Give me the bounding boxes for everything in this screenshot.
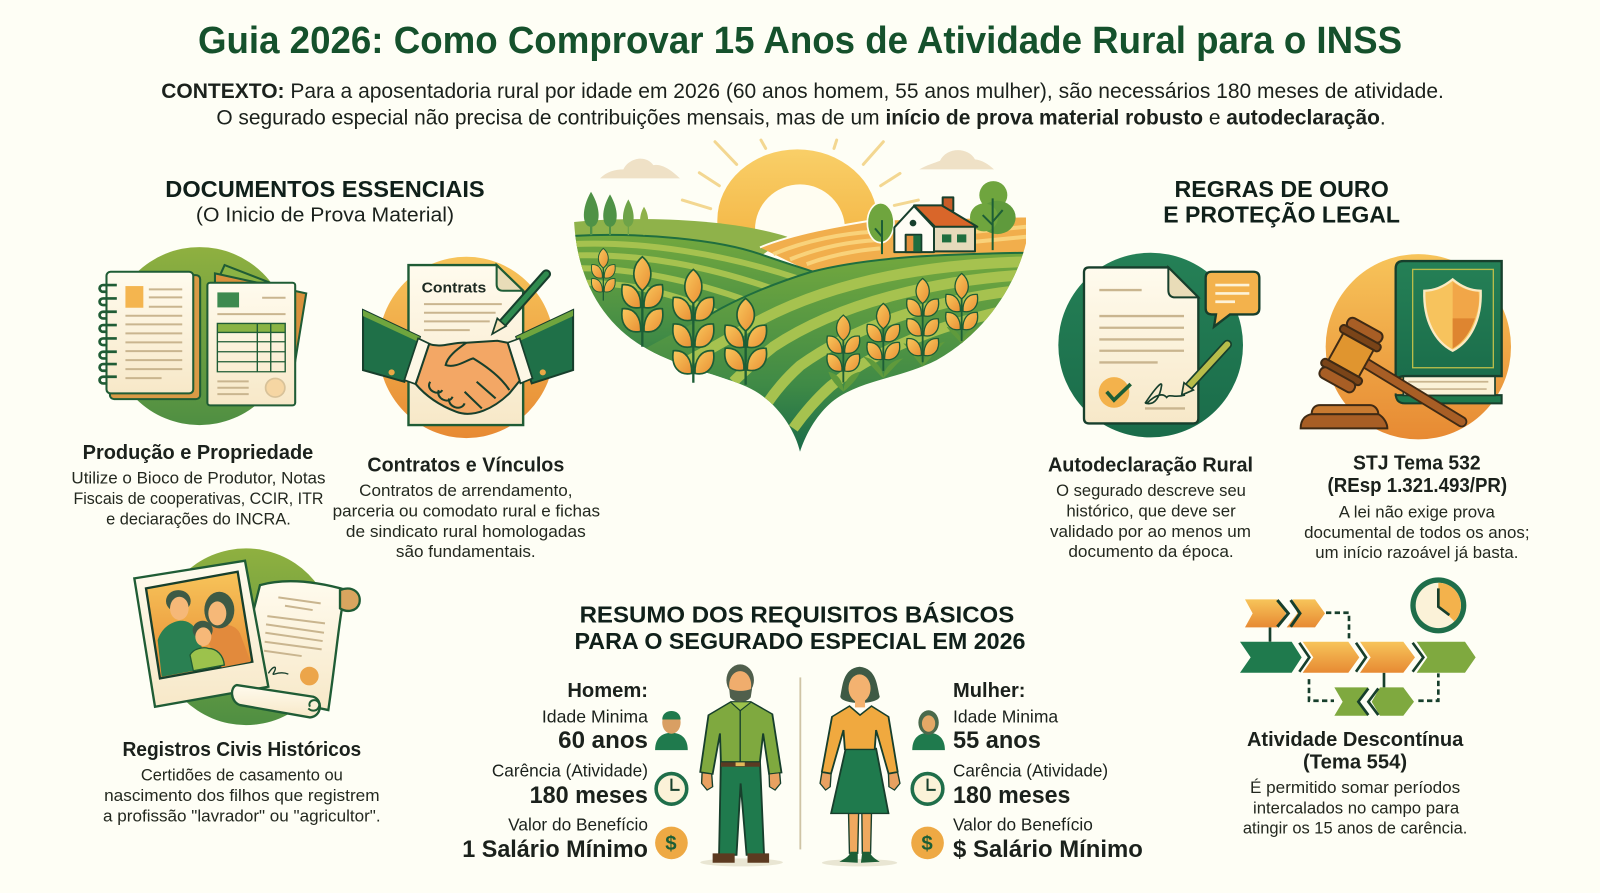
heading: regras de ouro: REGRAS DE OURO	[1174, 176, 1389, 202]
context text	[161, 79, 1444, 130]
icon: coin, man	[655, 827, 688, 859]
caption: registros civis historicos	[103, 739, 381, 826]
icon: coin, man: $	[665, 833, 677, 855]
caption: autodeclaracao rural: Autodeclaração Rural	[1048, 454, 1253, 476]
caption: contratos e vinculos	[333, 454, 600, 561]
caption: atividade descontinua: É permitido somar períodos	[1250, 778, 1460, 797]
icon: trees by the house	[867, 181, 1016, 254]
panel: atividade descontinua	[1240, 577, 1476, 838]
divider	[799, 677, 801, 849]
caption: atividade descontinua: Atividade Descontínua	[1247, 729, 1464, 751]
icon: gavel and law book	[1301, 254, 1511, 439]
column: mulher stats: Carência (Atividade)	[953, 761, 1108, 781]
column: mulher stats: 180 meses	[953, 782, 1070, 809]
icon: self-declaration document	[1058, 253, 1259, 437]
icon: handshake and contract: Contrats	[422, 281, 486, 296]
figures: man and woman	[700, 664, 900, 866]
icon: farmhouse	[894, 197, 977, 252]
icon: notebook and table	[100, 247, 306, 425]
column: mulher stats: Idade Minima	[953, 707, 1059, 727]
caption: autodeclaracao rural: documento da época.	[1068, 542, 1234, 561]
icon: clock, man	[656, 774, 687, 804]
icon: handshake and contract	[363, 257, 573, 438]
caption: registros civis historicos: Registros Civis Históricos	[122, 739, 361, 761]
icon: wheat plants	[591, 248, 979, 392]
column: mulher stats: Valor do Benefício	[953, 815, 1093, 835]
column: mulher stats: 55 anos	[953, 727, 1041, 754]
caption: contratos e vinculos: Contratos e Vínculos	[367, 454, 564, 476]
column: mulher stats: Mulher:	[953, 680, 1026, 702]
caption: autodeclaracao rural	[1048, 454, 1253, 561]
caption: atividade descontinua: (Tema 554)	[1303, 751, 1407, 773]
panel: regras de ouro	[1048, 253, 1530, 562]
caption: stj tema 532: A lei não exige prova	[1339, 502, 1496, 521]
caption: producao e propriedade: Utilize o Bioco de Produtor, Notas	[71, 469, 326, 488]
caption: atividade descontinua: intercalados no campo para	[1253, 798, 1460, 817]
heading: resumo	[574, 601, 1026, 654]
icon: woman avatar	[912, 710, 945, 750]
icon: coin, woman	[911, 827, 944, 859]
caption: autodeclaracao rural: O segurado descreve seu	[1056, 481, 1246, 500]
figure: woman	[820, 667, 900, 866]
column: homem stats	[462, 680, 648, 863]
farm fields	[570, 217, 1027, 457]
figure: man	[700, 664, 783, 866]
caption: registros civis historicos: nascimento dos filhos que registrem	[104, 786, 380, 805]
icon: sun with rays	[682, 140, 918, 274]
heading: regras de ouro: E PROTEÇÃO LEGAL	[1163, 201, 1400, 228]
caption: contratos e vinculos: Contratos de arrendamento,	[359, 481, 572, 500]
panel: resumo dos requisitos	[462, 601, 1143, 866]
column: homem stats: 180 meses	[530, 782, 648, 809]
heading: documentos essenciais: DOCUMENTOS ESSENCIAIS	[165, 176, 485, 202]
icon: cypress trees	[584, 192, 648, 235]
caption: atividade descontinua: atingir os 15 anos de carência.	[1243, 819, 1467, 838]
heading: documentos essenciais	[165, 176, 485, 227]
caption: registros civis historicos: Certidões de casamento ou	[141, 766, 343, 785]
column: homem stats: Idade Minima	[542, 707, 648, 727]
icon: clock, woman	[912, 774, 943, 804]
column: mulher stats: $ Salário Mínimo	[953, 836, 1143, 863]
caption: stj tema 532	[1304, 452, 1530, 562]
caption: autodeclaracao rural: histórico, que deve ser	[1066, 501, 1236, 520]
caption: contratos e vinculos: são fundamentais.	[396, 542, 536, 561]
caption: registros civis historicos: a profissão "lavrador" ou "agricultor".	[103, 807, 381, 826]
icon: clouds	[600, 150, 994, 178]
icon: timeline of chevrons with clock	[1240, 577, 1476, 716]
context text: O segurado especial não precisa de contribuições mensais, mas de um início de prova material robusto e autodeclaração.	[216, 106, 1386, 130]
title: Guia 2026: Como Comprovar 15 Anos de Atividade Rural para o INSS	[198, 19, 1402, 61]
caption: producao e propriedade	[71, 442, 326, 529]
caption: producao e propriedade: Fiscais de cooperativas, CCIR, ITR	[73, 489, 323, 508]
column: homem stats: 1 Salário Mínimo	[462, 836, 648, 863]
icon: family photo and certificate	[134, 548, 360, 725]
context text: CONTEXTO: Para a aposentadoria rural por idade em 2026 (60 anos homem, 55 anos mulher), são necessários 180 meses de atividade.	[161, 79, 1444, 103]
heading: resumo: PARA O SEGURADO ESPECIAL EM 2026	[574, 628, 1026, 654]
caption: contratos e vinculos: parceria ou comodato rural e fichas	[333, 501, 600, 520]
caption: stj tema 532: um início razoável já basta.	[1315, 543, 1518, 562]
caption: producao e propriedade: e deciarações do INCRA.	[106, 510, 291, 529]
icon: coin, woman: $	[921, 833, 933, 855]
column: homem stats: Homem:	[567, 680, 648, 702]
central illustration: farm landscape	[570, 140, 1027, 457]
caption: stj tema 532: documental de todos os anos;	[1304, 523, 1530, 542]
panel: registros civis	[103, 548, 381, 826]
heading: regras de ouro	[1163, 176, 1400, 228]
column: homem stats: 60 anos	[558, 727, 648, 754]
column: mulher stats	[953, 680, 1143, 863]
caption: stj tema 532: (REsp 1.321.493/PR)	[1328, 475, 1507, 497]
icon: man avatar	[655, 711, 688, 750]
caption: producao e propriedade: Produção e Propriedade	[83, 442, 313, 464]
caption: atividade descontinua	[1243, 729, 1467, 838]
column: homem stats: Valor do Benefício	[508, 815, 648, 835]
heading: resumo: RESUMO DOS REQUISITOS BÁSICOS	[580, 601, 1014, 628]
caption: contratos e vinculos: de sindicato rural homologadas	[346, 522, 586, 541]
panel: left documents top row	[71, 247, 600, 561]
column: homem stats: Carência (Atividade)	[492, 761, 648, 781]
caption: autodeclaracao rural: validado por ao menos um	[1050, 522, 1251, 541]
heading: documentos essenciais: (O Inicio de Prova Material)	[196, 205, 454, 227]
caption: stj tema 532: STJ Tema 532	[1353, 452, 1481, 474]
